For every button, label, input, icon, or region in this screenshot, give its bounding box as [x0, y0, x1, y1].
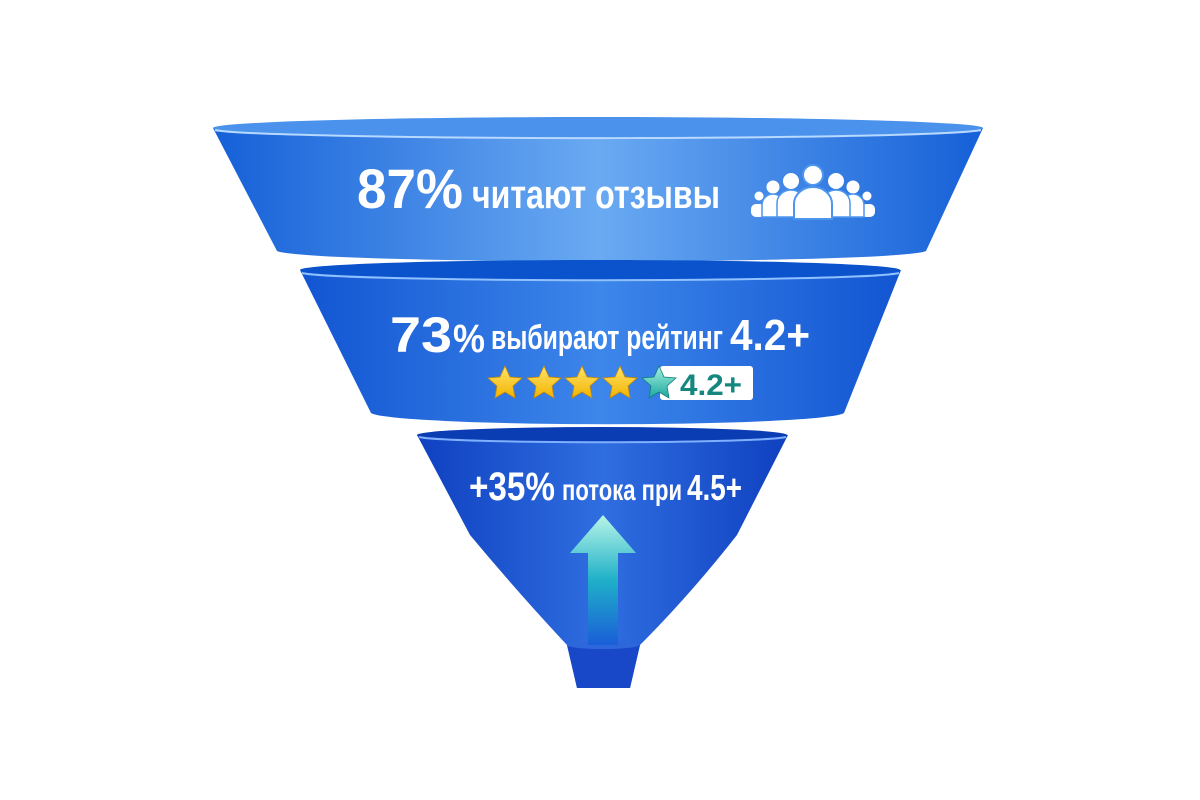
heading: +35% потока при 4.5+ [469, 465, 742, 509]
heading: 87% читают отзывы [357, 157, 720, 220]
tier 3: funnel cone with spout [417, 427, 788, 688]
tier 1: reads reviews [213, 117, 983, 261]
heading: 73% выбирают рейтинг 4.2+: 4.2+ [730, 311, 810, 360]
badge: 4.2+: 4.2+ [680, 369, 742, 402]
heading: +35% потока при 4.5+: 4.5+ [687, 467, 742, 508]
heading: +35% потока при 4.5+: +35% [469, 465, 555, 509]
heading: 73% выбирают рейтинг 4.2+: выбирают рейтинг [491, 319, 723, 357]
heading: 73% выбирают рейтинг 4.2+: 73 [390, 307, 452, 363]
heading: 73% выбирают рейтинг 4.2+ [390, 307, 810, 363]
icon: people group [751, 165, 875, 219]
tier 2: choose rating 4.2+ [300, 260, 901, 424]
heading: 87% читают отзывы: читают отзывы [472, 173, 720, 217]
heading: 87% читают отзывы: 87% [357, 157, 463, 220]
rating stars with badge [488, 366, 753, 402]
heading: 73% выбирают рейтинг 4.2+: % [453, 317, 485, 361]
heading: +35% потока при 4.5+: потока при [562, 474, 682, 507]
arrow: up [570, 515, 636, 645]
badge: 4.2+ [660, 366, 753, 402]
